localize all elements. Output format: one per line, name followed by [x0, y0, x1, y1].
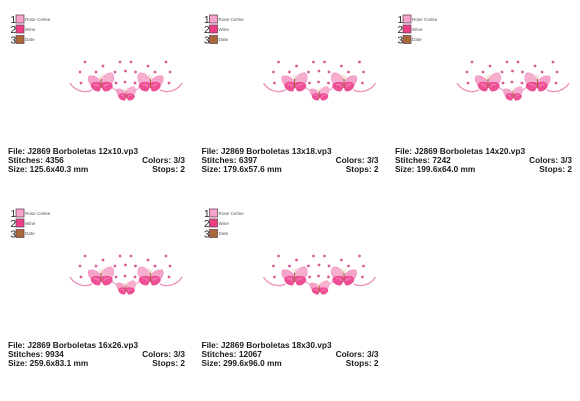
file details: Stops: 2: [539, 164, 572, 174]
file details: Colors: 3/3: [336, 155, 379, 165]
file details: File: J2869 Borboletas 14x20.vp3: [395, 146, 525, 156]
color legend: Wine: [218, 27, 229, 32]
file details: Stitches: 7242: [395, 155, 451, 165]
file details: Colors: 3/3: [142, 349, 185, 359]
panel: 14x20 design: [395, 15, 572, 174]
file details: Stops: 2: [346, 358, 379, 368]
color legend: Rose Cerise: [25, 211, 51, 216]
color legend: 3: [204, 230, 210, 240]
file details: File: J2869 Borboletas 16x26.vp3: [8, 340, 138, 350]
file details: Stitches: 12067: [202, 349, 262, 359]
file details: [202, 340, 379, 368]
panel: 18x30 design: [202, 209, 379, 368]
color legend: Rose Cerise: [25, 17, 51, 22]
color legend: 3: [10, 36, 16, 46]
color legend: 1: [398, 15, 404, 26]
color legend: Wine: [25, 27, 36, 32]
file details: [8, 146, 185, 174]
color legend: 2: [398, 25, 404, 36]
color legend: 2: [10, 219, 16, 230]
color legend: 1: [204, 15, 210, 26]
file details: [202, 146, 379, 174]
color legend: Date: [25, 37, 35, 42]
color legend: [204, 15, 244, 46]
color legend: Date: [412, 37, 422, 42]
color legend: 1: [10, 209, 16, 220]
file details: Stops: 2: [152, 358, 185, 368]
color legend: Rose Cerise: [218, 17, 244, 22]
file details: Size: 199.6x64.0 mm: [395, 164, 475, 174]
file details: Stitches: 6397: [202, 155, 258, 165]
color legend: 3: [10, 230, 16, 240]
panel: 12x10 design: [8, 15, 185, 174]
color legend: 1: [10, 15, 16, 26]
color legend: 1: [204, 209, 210, 220]
file details: File: J2869 Borboletas 18x30.vp3: [202, 340, 332, 350]
color legend: Rose Cerise: [412, 17, 438, 22]
color legend: Rose Cerise: [218, 211, 244, 216]
color legend: Wine: [412, 27, 423, 32]
file details: Colors: 3/3: [529, 155, 572, 165]
file details: [8, 340, 185, 368]
color legend: Date: [218, 231, 229, 236]
file details: Colors: 3/3: [142, 155, 185, 165]
file details: Size: 179.6x57.6 mm: [202, 164, 282, 174]
color legend: [398, 15, 438, 46]
color legend: 3: [398, 36, 404, 46]
color legend: Wine: [25, 221, 36, 226]
panel: 13x18 design: [202, 15, 379, 174]
color legend: 2: [204, 25, 210, 36]
color legend: Date: [218, 37, 229, 42]
color legend: 2: [10, 25, 16, 36]
color legend: [204, 209, 244, 240]
color legend: [10, 209, 51, 240]
butterfly embroidery design: [70, 255, 182, 294]
file details: [395, 146, 572, 174]
file details: Stops: 2: [346, 164, 379, 174]
color legend: 2: [204, 219, 210, 230]
color legend: 3: [204, 36, 210, 46]
color legend: Date: [25, 231, 35, 236]
file details: Size: 299.6x96.0 mm: [202, 358, 282, 368]
file details: Colors: 3/3: [336, 349, 379, 359]
panel: 16x26 design: [8, 209, 185, 368]
color legend: Wine: [218, 221, 229, 226]
file details: Stops: 2: [152, 164, 185, 174]
file details: Size: 125.6x40.3 mm: [8, 164, 88, 174]
file details: Size: 259.6x83.1 mm: [8, 358, 88, 368]
file details: File: J2869 Borboletas 13x18.vp3: [202, 146, 332, 156]
file details: File: J2869 Borboletas 12x10.vp3: [8, 146, 138, 156]
color legend: [10, 15, 51, 46]
butterfly embroidery design: [264, 61, 376, 100]
file details: Stitches: 9934: [8, 349, 64, 359]
butterfly embroidery design: [457, 61, 569, 100]
butterfly embroidery design: [264, 255, 376, 294]
butterfly embroidery design: [70, 61, 182, 100]
file details: Stitches: 4356: [8, 155, 64, 165]
